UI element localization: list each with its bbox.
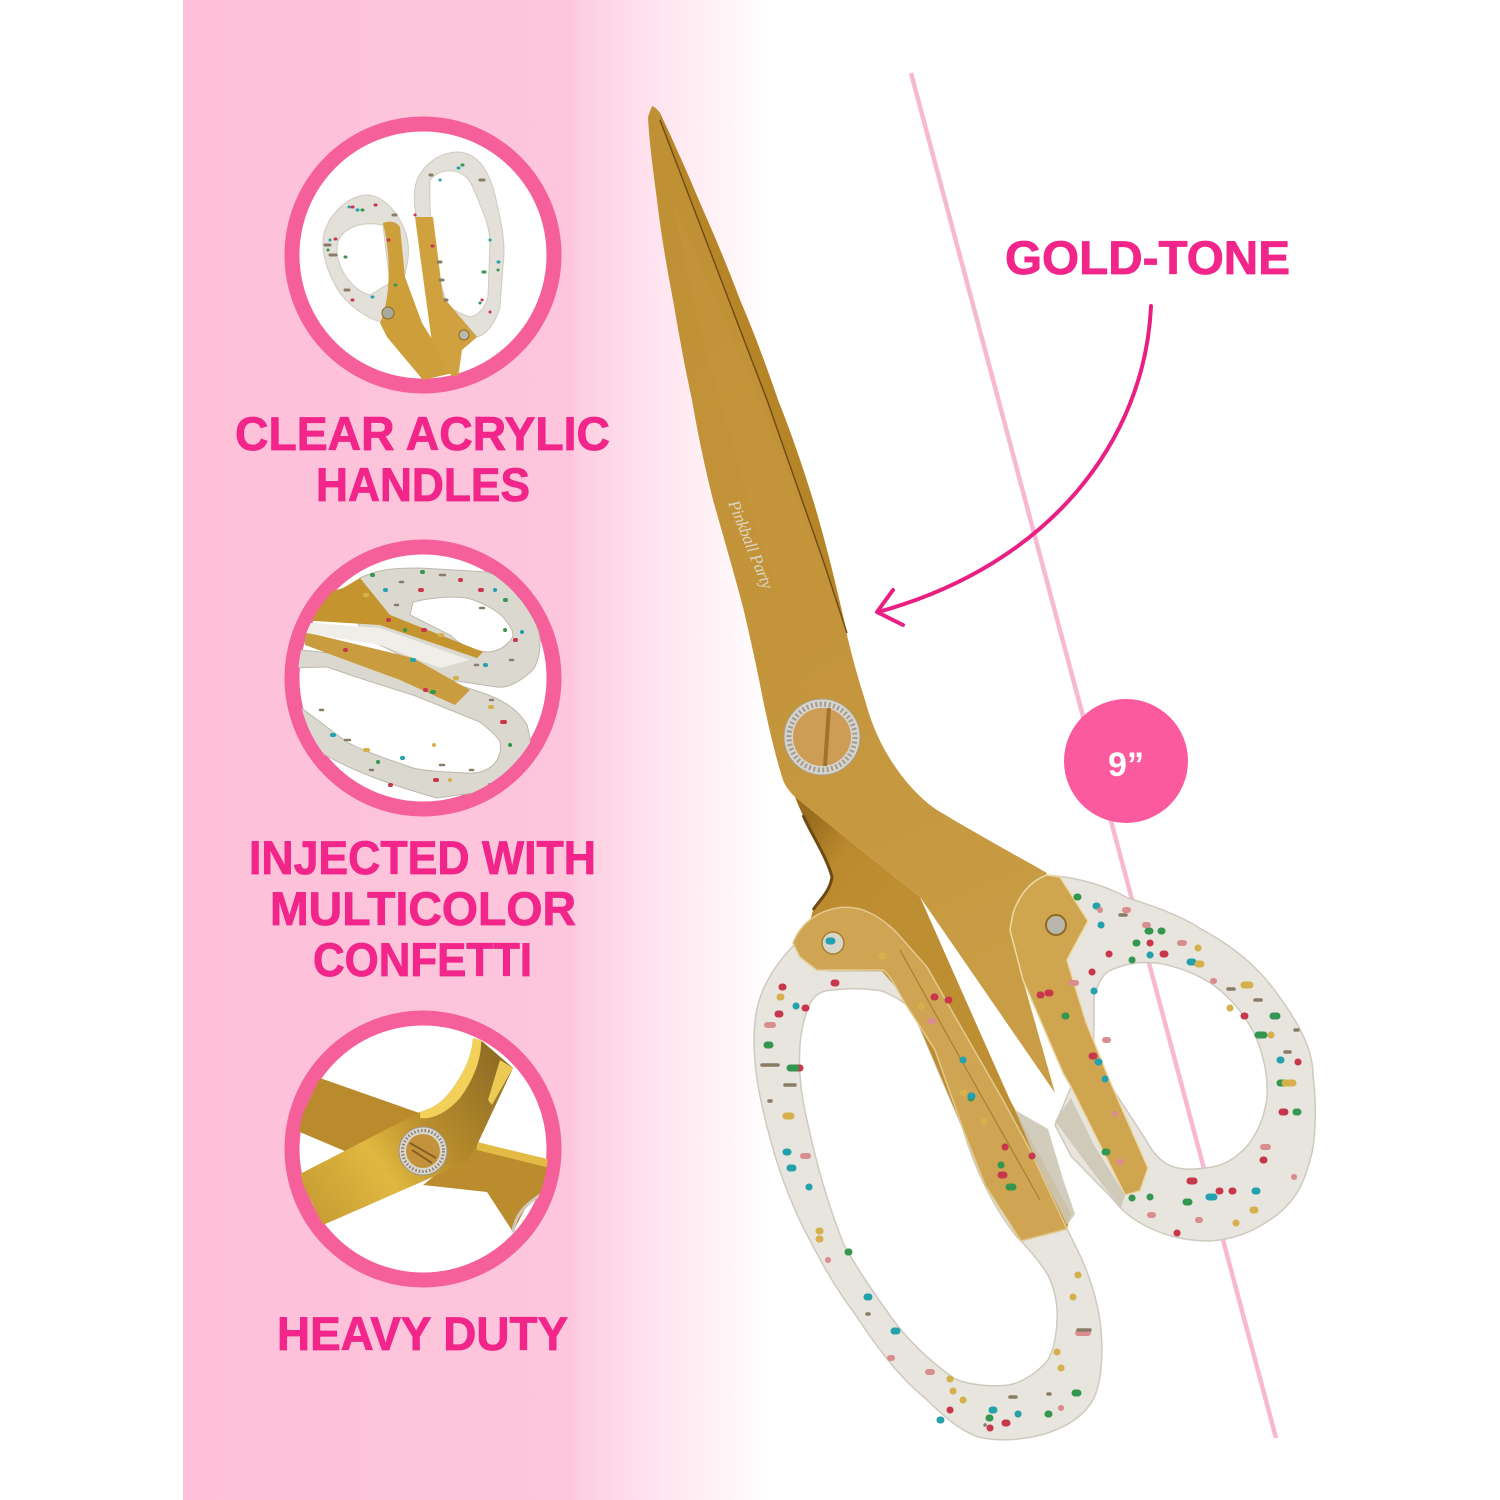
inset: clear acrylic handles: [292, 124, 554, 386]
heading: injected with multicolor confetti: INJECTED WITH: [249, 831, 596, 884]
inset: heavy duty: [292, 1018, 560, 1280]
badge: 9 inch length: [1064, 699, 1188, 823]
pivot screw: [784, 699, 860, 775]
heading: injected with multicolor confetti: CONFETTI: [313, 933, 532, 986]
inset gold pivot close-up: [295, 1038, 560, 1232]
heading: injected with multicolor confetti: MULTICOLOR: [270, 882, 576, 935]
right handle ring: [1047, 875, 1315, 1241]
left tang inner line: [900, 950, 1040, 1200]
inset close-up handles: [290, 568, 540, 798]
neck brushed shadow: [803, 815, 832, 910]
heading: gold-tone: GOLD-TONE: [1005, 231, 1290, 284]
confetti: [762, 897, 1298, 1428]
upper blade: [648, 106, 1055, 1093]
bolt right: [1046, 915, 1066, 935]
blade top bevel: [660, 113, 847, 633]
badge: 9 inch length: 9”: [1108, 746, 1144, 784]
inset: multicolor confetti: [290, 547, 554, 809]
inset scissors handles: [323, 152, 504, 385]
lower blade shaft and neck: [795, 797, 1071, 1241]
blade dark line: [660, 120, 847, 633]
background: pink fading panel: [183, 0, 773, 1500]
bolt left: [822, 932, 844, 954]
heading: clear acrylic handles: CLEAR ACRYLIC: [235, 407, 610, 460]
right gold tang plate: [1010, 875, 1148, 1195]
ring and white disc: [292, 1018, 554, 1280]
heading: heavy duty: HEAVY DUTY: [277, 1307, 568, 1360]
infographic canvas: [183, 0, 1316, 1500]
brand script on blade: Pinkball Party: [724, 496, 777, 592]
measure line: [911, 73, 1276, 1438]
ring and white disc: [292, 124, 554, 386]
left handle ring: [754, 945, 1102, 1440]
left gold tang plate: [793, 907, 1067, 1241]
acrylic joints: [1015, 1098, 1125, 1225]
blade center facet: [672, 200, 862, 700]
arrow: gold-tone pointer: [877, 306, 1151, 625]
ring and white disc: [292, 547, 554, 809]
product: gold scissors with confetti handles: [648, 106, 1315, 1440]
heading: clear acrylic handles: HANDLES: [316, 458, 530, 511]
